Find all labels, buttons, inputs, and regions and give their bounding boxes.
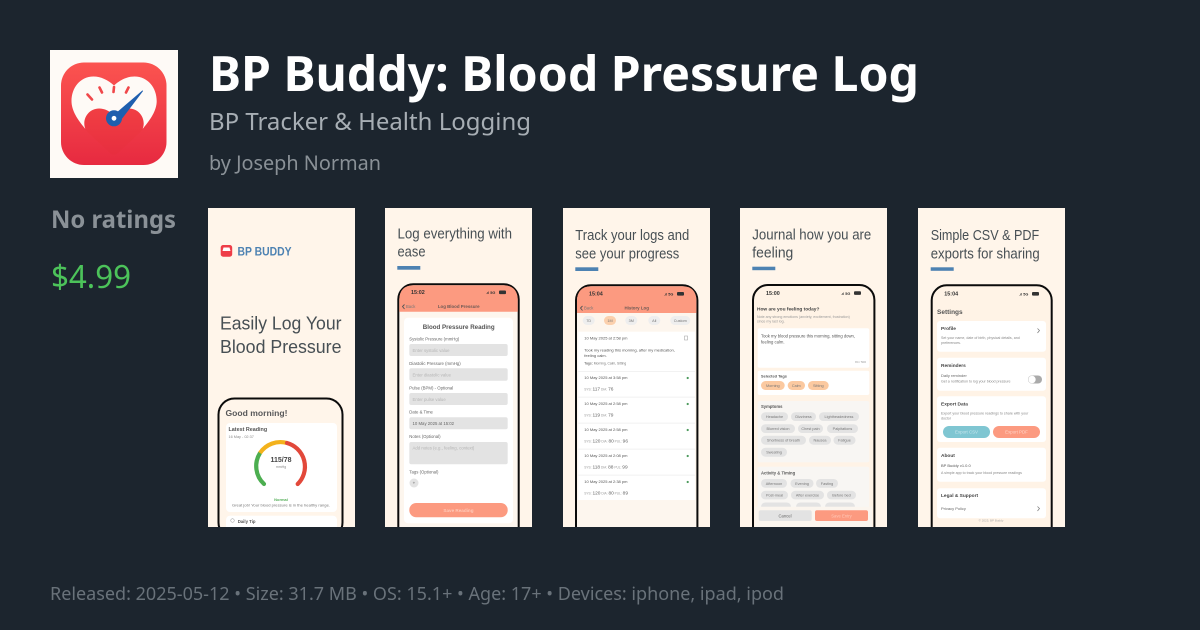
panel: screenshot 5 settings: Export PDF bbox=[1005, 430, 1028, 434]
panel: screenshot 3 history log: 10 May 2025 at 2:58 pm bbox=[584, 427, 628, 432]
panel: screenshot 3 history log: Track your logs and bbox=[575, 227, 689, 244]
panel: screenshot 1 easily log: Good morning! bbox=[226, 408, 288, 418]
footer metadata: Released: 2025-05-12 • Size: 31.7 MB • OS: 15.1+ • Age: 17+ • Devices: iphone, ipad, ipod bbox=[50, 582, 784, 606]
panel: screenshot 3 history log: see your progress bbox=[575, 245, 679, 262]
panel: screenshot 4 journal: Post-meal bbox=[766, 494, 783, 498]
panel: screenshot 5 settings: Get a notification to log your blood pressure bbox=[941, 380, 1011, 384]
panel: screenshot 3 history log: .ıl 5G bbox=[664, 293, 673, 297]
panel: screenshot 4 journal: since my last log. bbox=[757, 320, 785, 324]
panel: screenshot 2 log form: Log Blood Pressure bbox=[438, 304, 480, 309]
panel: screenshot 4 journal: Calm bbox=[792, 384, 801, 388]
panel: screenshot 4 journal: Lightheadedness bbox=[825, 415, 854, 419]
panel: screenshot 1 easily log: 115/78 bbox=[270, 457, 292, 464]
rating: No ratings bbox=[51, 203, 176, 236]
panel: screenshot 3 history log: 10 May 2025 at 2:08 pm bbox=[584, 453, 628, 458]
panel: screenshot 3 history log: 10 May 2025 at 2:58 pm bbox=[584, 336, 628, 341]
panel: screenshot 3 history log: All bbox=[652, 319, 657, 323]
panel: screenshot 4 journal: Morning bbox=[766, 384, 780, 388]
panel: screenshot 1 easily log: Daily Tip bbox=[238, 519, 256, 524]
panel: screenshot 5 settings: preferences. bbox=[941, 341, 961, 345]
developer: by Joseph Norman bbox=[209, 149, 381, 176]
panel: screenshot 1 easily log: Latest Reading bbox=[228, 427, 267, 433]
panel: screenshot 5 settings: Set your name, date of birth, physical details, and bbox=[941, 336, 1020, 340]
panel: screenshot 2 log form: ease bbox=[398, 244, 426, 260]
panel: screenshot 2 log form: .ıl 5G bbox=[486, 291, 495, 295]
panel: screenshot 2 log form bbox=[385, 208, 532, 544]
panel: screenshot 3 history log: feeling calm. bbox=[584, 353, 607, 358]
panel: screenshot 5 settings: Settings bbox=[937, 309, 963, 316]
panel: screenshot 3 history log: 15:04 bbox=[589, 292, 603, 298]
panel: screenshot 4 journal: Before bed bbox=[832, 494, 851, 498]
panel: screenshot 4 journal: .ıl 5G bbox=[841, 292, 850, 296]
panel: screenshot 5 settings: A simple app to track your blood pressure readings bbox=[941, 471, 1022, 475]
panel: screenshot 5 settings: Legal & Support bbox=[941, 493, 978, 499]
panel: screenshot 5 settings bbox=[918, 208, 1065, 545]
panel: screenshot 4 journal: Palpitations bbox=[833, 427, 852, 431]
panel: screenshot 5 settings: 15:04 bbox=[944, 292, 958, 298]
panel: screenshot 5 settings: About bbox=[941, 453, 955, 459]
panel: screenshot 3 history log: SYS: 120 DIA: 80 PUL: 89 bbox=[584, 491, 628, 497]
panel: screenshot 3 history log: 1M bbox=[607, 319, 613, 323]
panel: screenshot 3 history log: 10 May 2025 at 3:58 pm bbox=[584, 375, 628, 380]
panel: screenshot 4 journal: Nausea bbox=[813, 439, 827, 443]
panel: screenshot 4 journal: Chest pain bbox=[801, 427, 820, 431]
panel: screenshot 3 history log: SYS: 120 DIA: 80 PUL: 96 bbox=[584, 439, 628, 445]
panel: screenshot 5 settings: exports for sharing bbox=[931, 245, 1040, 262]
panel: screenshot 5 settings: Daily reminder bbox=[941, 373, 967, 378]
panel: screenshot 3 history log: 7D bbox=[586, 319, 591, 323]
panel: screenshot 3 history log: SYS: 118 DIA: 88 PUL: 99 bbox=[584, 465, 628, 471]
title: BP Buddy: Blood Pressure Log bbox=[209, 41, 919, 106]
panel: screenshot 1 easily log bbox=[208, 208, 355, 538]
price: $4.99 bbox=[51, 255, 131, 298]
panel: screenshot 2 log form: + bbox=[413, 480, 416, 486]
panel: screenshot 2 log form: Systolic Pressure (mmHg) bbox=[409, 336, 460, 341]
panel: screenshot 1 easily log: Great job! Your blood pressure is in the healthy range. bbox=[232, 504, 330, 508]
panel: screenshot 5 settings: doctor bbox=[941, 416, 952, 420]
panel: screenshot 4 journal bbox=[740, 208, 887, 545]
panel: screenshot 5 settings: Export Data bbox=[941, 402, 968, 408]
panel: screenshot 4 journal: 15:00 bbox=[766, 291, 780, 297]
panel: screenshot 2 log form: Enter diastolic value bbox=[412, 372, 452, 377]
panel: screenshot 4 journal: 84 / 500 bbox=[855, 360, 866, 364]
panel: screenshot 4 journal: Sitting bbox=[813, 384, 824, 388]
panel: screenshot 3 history log: History Log bbox=[624, 306, 649, 310]
panel: screenshot 4 journal: Shortness of breath bbox=[767, 439, 800, 443]
panel: screenshot 4 journal: Fasting bbox=[821, 482, 833, 486]
panel: screenshot 5 settings: Export CSV bbox=[955, 430, 978, 434]
panel: screenshot 4 journal: Dizziness bbox=[795, 415, 812, 419]
panel: screenshot 3 history log: 10 May 2025 at 2:58 pm bbox=[584, 401, 628, 406]
panel: screenshot 1 easily log: Blood Pressure bbox=[220, 337, 342, 357]
panel: screenshot 4 journal: Symptoms bbox=[761, 404, 783, 409]
panel: screenshot 3 history log: SYS: 119 DIA: 79 bbox=[584, 412, 614, 418]
panel: screenshot 4 journal: Selected Tags bbox=[761, 374, 787, 378]
panel: screenshot 2 log form: Back bbox=[406, 304, 416, 309]
panel: screenshot 5 settings: Privacy Policy bbox=[941, 506, 966, 511]
panel: screenshot 2 log form: Blood Pressure Reading bbox=[423, 324, 495, 331]
panel: screenshot 5 settings: © 2025, BP Buddy bbox=[979, 518, 1004, 522]
panel: screenshot 4 journal: Afternoon bbox=[766, 482, 782, 486]
panel: screenshot 2 log form: Enter pulse value bbox=[412, 397, 446, 402]
panel: screenshot 4 journal: feeling bbox=[752, 245, 793, 262]
panel: screenshot 4 journal: Blurred vision bbox=[766, 427, 790, 431]
panel: screenshot 1 easily log: Normal bbox=[274, 497, 288, 502]
panel: screenshot 3 history log: 3M bbox=[629, 319, 634, 323]
panel: screenshot 2 log form: 10 May 2025 at 15:02 bbox=[412, 421, 455, 426]
panel: screenshot 4 journal: Took my blood pressure this morning, sitting down, bbox=[761, 333, 855, 338]
panel: screenshot 2 log form: Log everything with bbox=[398, 226, 512, 242]
subtitle: BP Tracker & Health Logging bbox=[209, 105, 531, 138]
panel: screenshot 4 journal: Note any strong emotions (anxiety, excitement, frustration) bbox=[757, 315, 850, 319]
panel: screenshot 5 settings: Export your blood pressure readings to share with your bbox=[941, 412, 1029, 416]
panel: screenshot 4 journal: Evening bbox=[795, 482, 809, 486]
panel: screenshot 4 journal: feeling calm. bbox=[761, 339, 785, 344]
panel: screenshot 5 settings: .ıl 5G bbox=[1019, 293, 1028, 297]
panel: screenshot 3 history log: 10 May 2025 at 2:38 pm bbox=[584, 479, 628, 484]
panel: screenshot 1 easily log: mmHg bbox=[276, 465, 286, 469]
panel: screenshot 3 history log: SYS: 117 DIA: 76 bbox=[584, 386, 614, 392]
panel: screenshot 5 settings: Simple CSV & PDF bbox=[931, 227, 1039, 244]
panel: screenshot 2 log form: 15:02 bbox=[411, 290, 425, 296]
panel: screenshot 2 log form: Pulse (BPM) - Optional bbox=[409, 385, 453, 390]
panel: screenshot 4 journal: Activity & Timing bbox=[761, 470, 796, 476]
panel: screenshot 2 log form: Date & Time bbox=[409, 410, 434, 415]
panel: screenshot 5 settings: BP Buddy v1.0.0 bbox=[941, 463, 972, 468]
panel: screenshot 5 settings: Reminders bbox=[941, 363, 966, 369]
panel: screenshot 3 history log: Back bbox=[584, 306, 594, 310]
panel: screenshot 1 easily log: 16 May - 02:37 bbox=[228, 435, 254, 439]
panel: screenshot 4 journal: Headache bbox=[766, 415, 783, 419]
panel: screenshot 5 settings: Profile bbox=[941, 326, 956, 332]
panel: screenshot 4 journal: Sweating bbox=[766, 451, 782, 455]
panel: screenshot 2 log form: Enter systolic value bbox=[412, 348, 450, 353]
panel: screenshot 4 journal: After exercise bbox=[796, 494, 819, 498]
panel: screenshot 2 log form: Save Reading bbox=[443, 508, 474, 513]
panel: screenshot 4 journal: Fatigue bbox=[838, 439, 851, 443]
panel: screenshot 4 journal: How are you feeling today? bbox=[757, 307, 819, 313]
panel: screenshot 4 journal: Journal how you are bbox=[752, 226, 871, 243]
icon: app logo heart gauge bbox=[50, 50, 178, 178]
panel: screenshot 1 easily log: BP BUDDY bbox=[238, 246, 292, 258]
panel: screenshot 2 log form: Tags (Optional) bbox=[409, 469, 439, 474]
panel: screenshot 2 log form: Diastolic Pressure (mmHg) bbox=[409, 361, 461, 366]
panel: screenshot 3 history log: Tags: Morning, Calm, Sitting bbox=[584, 361, 626, 365]
panel: screenshot 3 history log bbox=[563, 208, 710, 545]
panel: screenshot 4 journal: Cancel bbox=[778, 513, 792, 518]
panel: screenshot 3 history log: Custom bbox=[674, 319, 687, 323]
panel: screenshot 2 log form: Add notes (e.g., feeling, context) bbox=[412, 446, 475, 450]
panel: screenshot 4 journal: Save Entry bbox=[831, 513, 853, 518]
panel: screenshot 3 history log: Took my reading this morning, after my medication, bbox=[584, 348, 675, 353]
panel: screenshot 1 easily log: Easily Log Your bbox=[220, 314, 342, 334]
panel: screenshot 2 log form: Notes (Optional) bbox=[409, 434, 441, 439]
